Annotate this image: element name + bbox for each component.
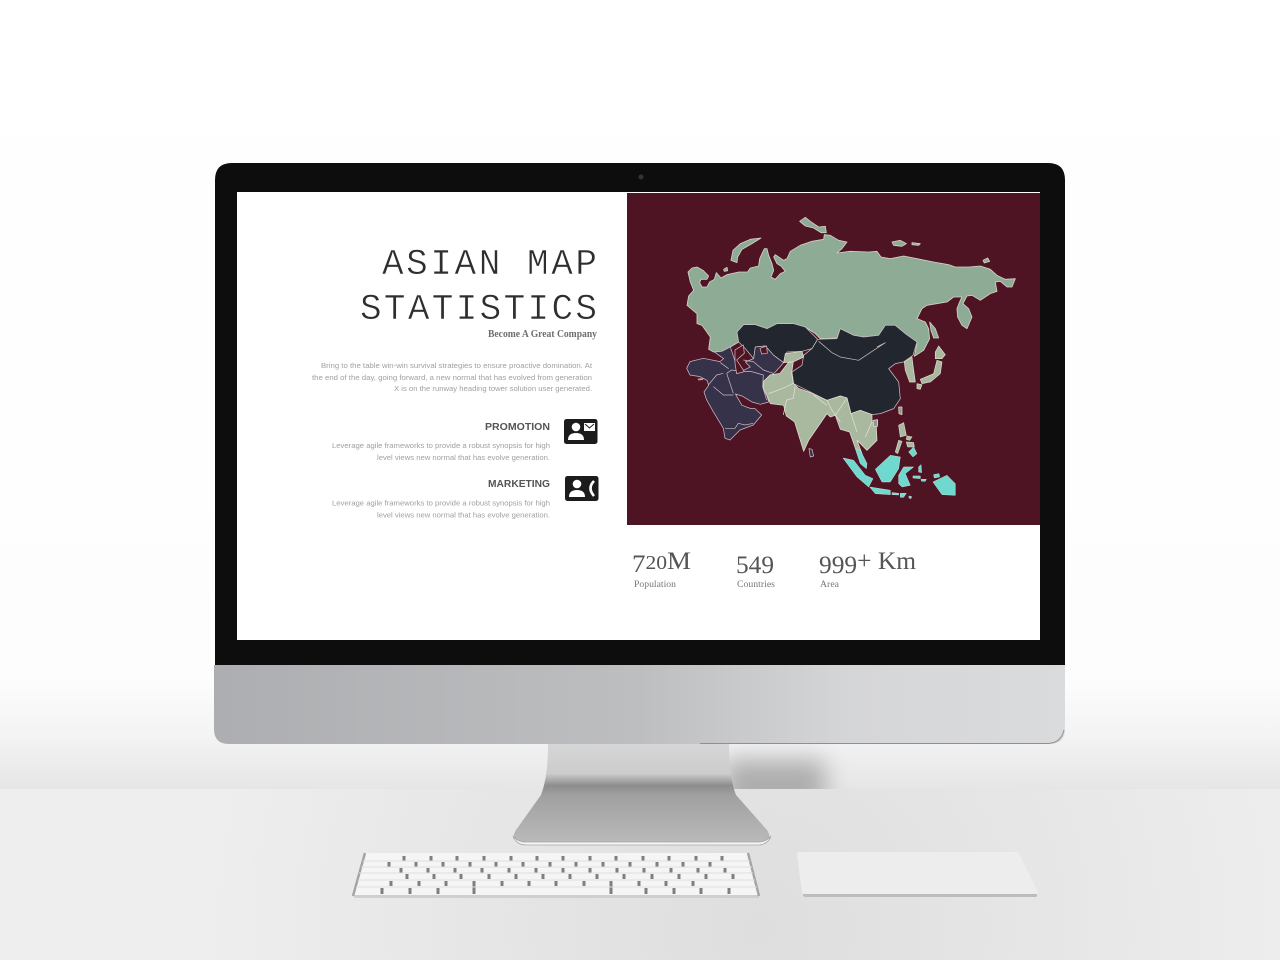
keyboard — [353, 853, 759, 898]
region: Indonesia and Malaysia — [843, 447, 955, 499]
slide screen — [237, 192, 1040, 640]
stat: countries: Countries — [737, 580, 775, 590]
title — [360, 244, 597, 330]
region: Korea and Japan — [904, 346, 945, 389]
stat: area: Area — [820, 580, 840, 590]
icon: contact with phone — [565, 476, 598, 501]
item: marketing: level views new normal that has evolve generation. — [377, 510, 550, 520]
item: marketing: Leverage agile frameworks to provide a robust synopsis for high — [332, 498, 550, 508]
trackpad — [797, 852, 1038, 897]
subtitle: Become A Great Company — [488, 329, 598, 340]
stat: population: 7 — [632, 551, 645, 578]
stat: area: + Km — [857, 548, 917, 575]
slide text and icons — [312, 244, 917, 590]
stat: population — [632, 548, 691, 590]
region: Kazakhstan, Mongolia and China — [737, 324, 917, 415]
item: marketing: MARKETING — [488, 478, 550, 490]
intro paragraph: the end of the day, going forward, a new normal that has evolved from generation — [312, 373, 592, 382]
intro paragraph: X is on the runway heading tower solution user generated. — [394, 384, 592, 393]
stat: area — [819, 548, 917, 590]
map of Asia — [687, 217, 1015, 499]
stat: population: 20 — [645, 552, 667, 574]
stat: population: M — [667, 548, 691, 575]
title: STATISTICS — [360, 289, 597, 330]
intro paragraph: Bring to the table win-win survival strategies to ensure proactive domination. At — [321, 361, 592, 370]
region: Philippines — [895, 423, 914, 454]
stat: countries — [736, 552, 775, 590]
region: Russia — [687, 217, 1015, 356]
item: promotion — [332, 421, 550, 462]
title: ASIAN MAP — [382, 244, 597, 285]
item: promotion: Leverage agile frameworks to provide a robust synopsis for high — [332, 441, 550, 450]
item: promotion: level views new normal that has evolve generation. — [377, 453, 550, 462]
monitor body — [214, 163, 1065, 744]
stat: countries: 549 — [736, 552, 774, 579]
stat: area: 999 — [819, 552, 857, 579]
stat: population: Population — [634, 580, 676, 590]
intro paragraph — [312, 361, 592, 393]
monitor stand — [513, 744, 771, 845]
panel: map background — [627, 193, 1040, 525]
item: marketing — [332, 478, 550, 520]
region: South and Southeast Asia — [763, 351, 902, 454]
item: promotion: PROMOTION — [485, 421, 550, 433]
icon: contact with envelope — [564, 419, 598, 444]
region: Middle East and Central Asia — [687, 345, 814, 457]
